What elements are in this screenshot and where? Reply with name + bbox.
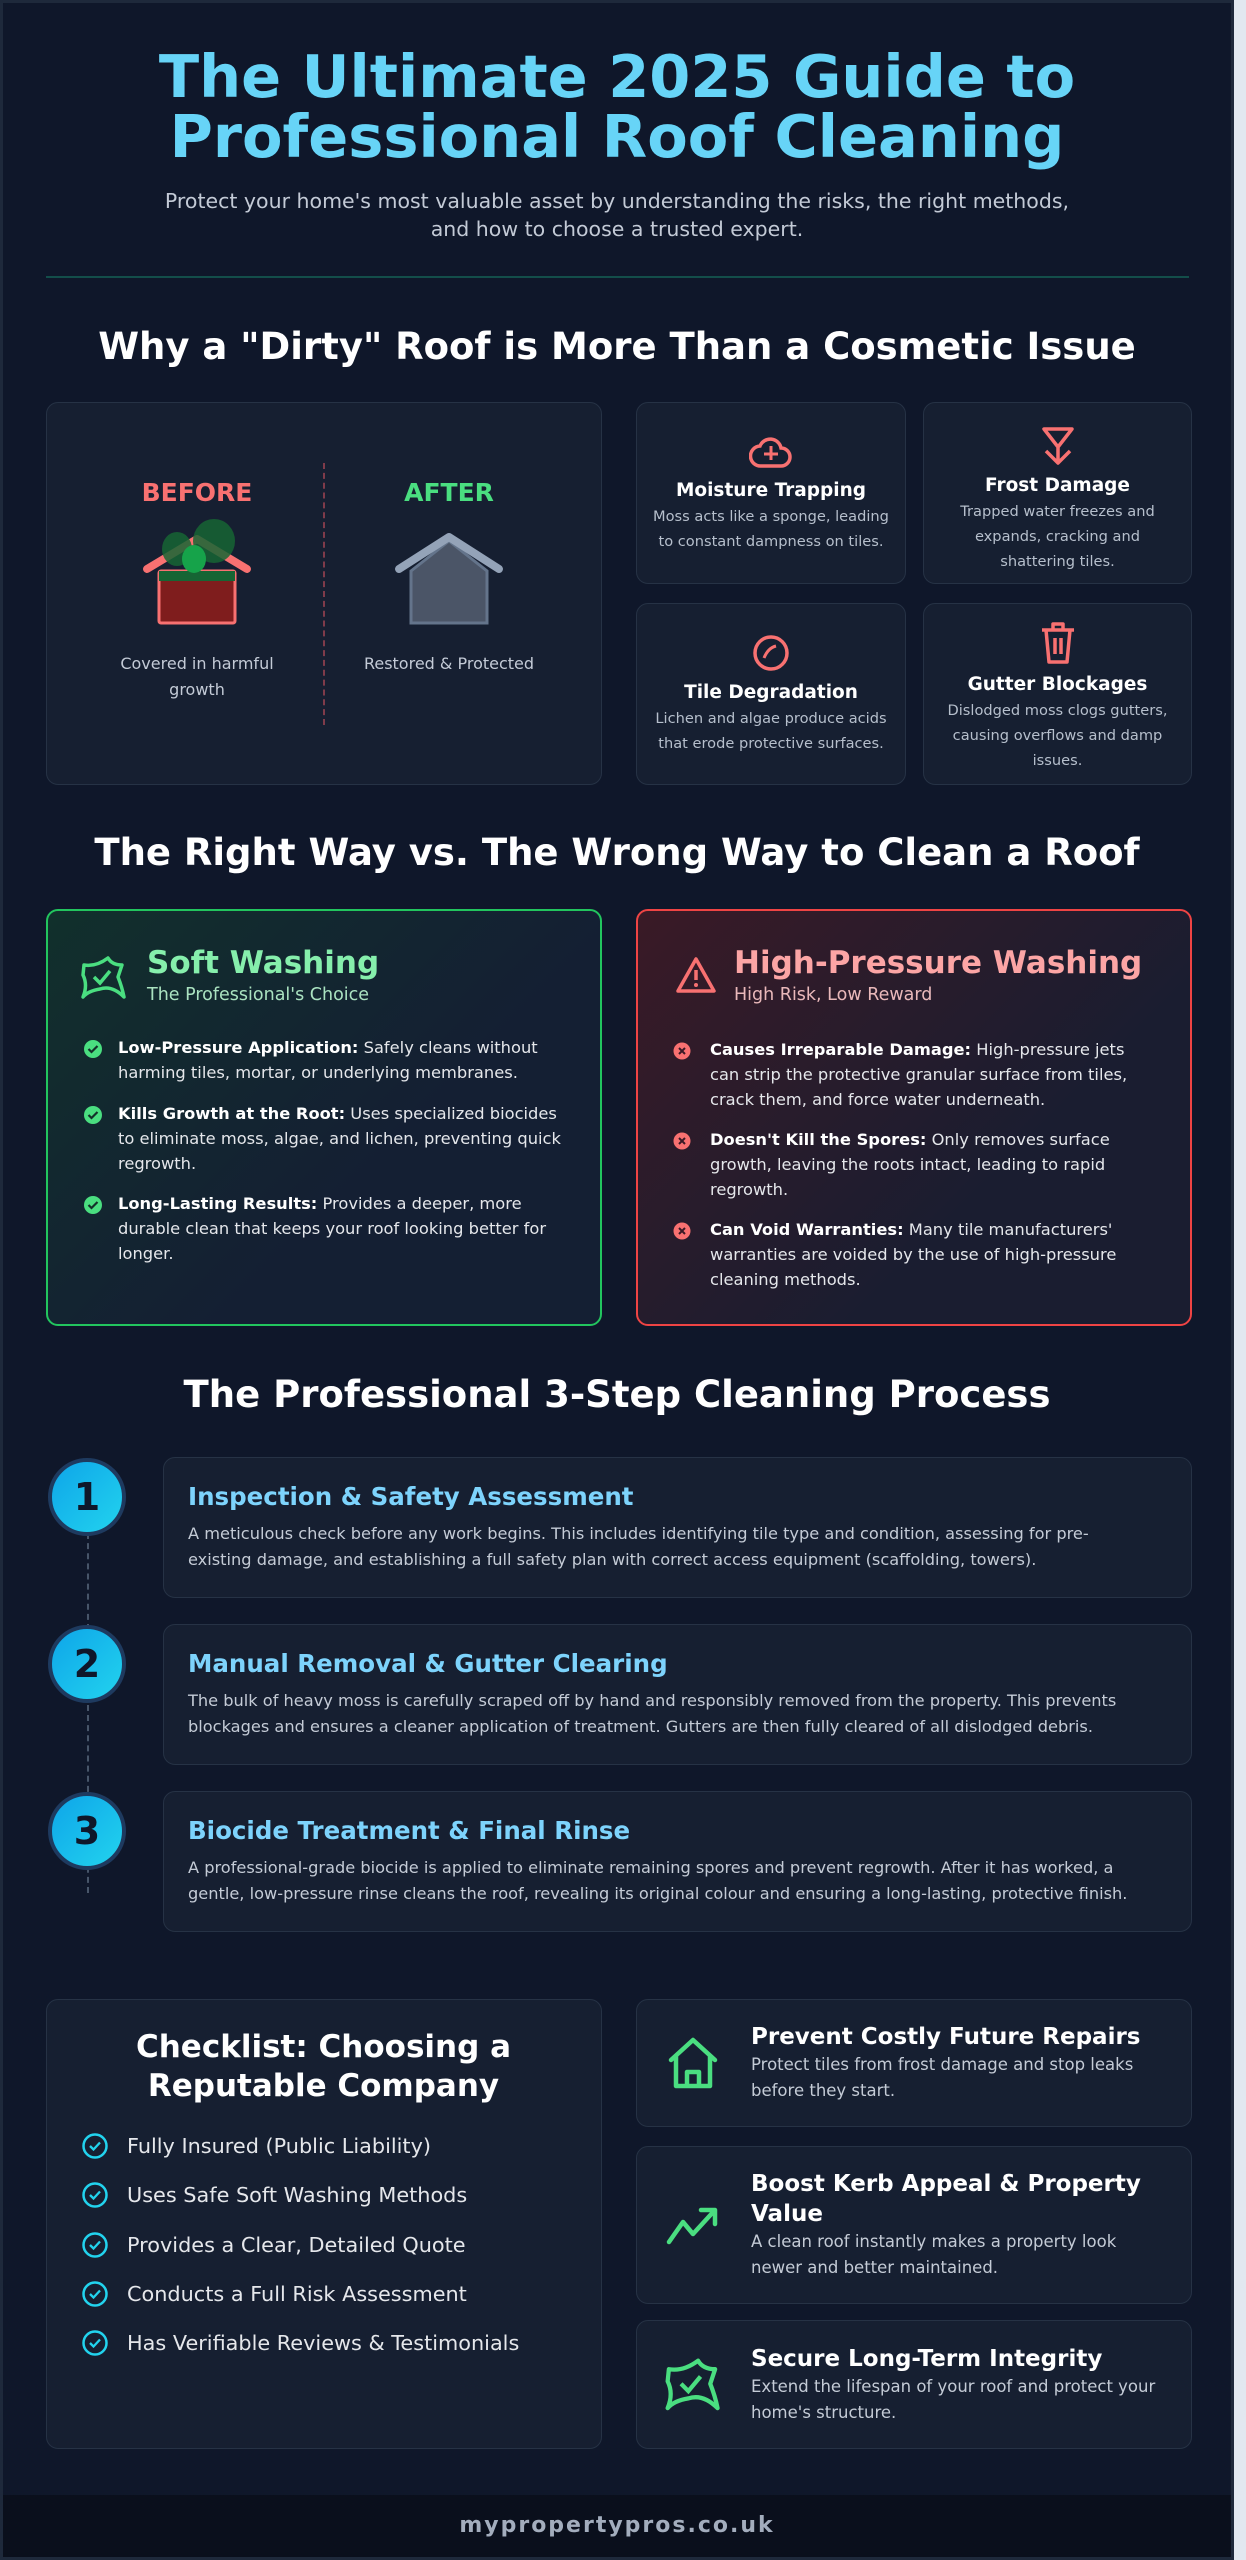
before column: Covered in harmful [120,654,274,673]
step 3 number [48,1792,126,1870]
subtitle [165,189,1069,241]
panel: checklist [46,1999,602,2449]
high pressure header: High Risk, Low Reward [734,985,932,1005]
icon: shield check [81,956,126,999]
benefit: prevent repairs [636,1999,1192,2127]
title: Professional Roof Cleaning [170,102,1064,171]
panel: soft washing: Long-Lasting Results: Provides a deeper, more durable clean that keeps your roof looking better for longer. [118,1194,546,1263]
icon: trend up [666,2208,718,2244]
card: moisture trapping: Moss acts like a sponge, leading [653,508,889,525]
benefit: kerb appeal: Value [751,2201,823,2227]
icon: clean house [395,533,503,624]
step 1 card: A meticulous check before any work begins. This includes identifying tile type and condition, assessing for pre-existing damage, and establishing a full safety plan with correct access equipment (scaffolding, towers). [188,1524,1089,1569]
checklist items: Uses Safe Soft Washing Methods [127,2183,467,2207]
benefit: kerb appeal: newer and better maintained. [751,2258,998,2277]
heading: right vs wrong: The Right Way vs. The Wrong Way to Clean a Roof [94,831,1140,874]
panel: before/after [46,402,602,785]
icon: gauge [753,635,789,671]
checklist items: Conducts a Full Risk Assessment [127,2282,467,2306]
step 3 card: A professional-grade biocide is applied to eliminate remaining spores and prevent regrowth. After it has worked, a gentle, low-pressure rinse cleans the roof, revealing its original colour and ensuring a long-lasting, protective finish. [188,1858,1127,1903]
soft washing header: The Professional's Choice [147,985,369,1005]
benefit: kerb appeal [636,2146,1192,2304]
checklist items [82,2133,519,2356]
card: gutter blockages [923,603,1192,785]
benefit: kerb appeal: A clean roof instantly makes a property look [751,2232,1116,2251]
step 3 card: Biocide Treatment & Final Rinse [188,1816,630,1845]
benefit: kerb appeal: Boost Kerb Appeal & Property [751,2171,1141,2197]
checklist title: Checklist: Choosing a [136,2029,511,2065]
icon: mossy house [143,519,251,624]
checklist items: Provides a Clear, Detailed Quote [127,2233,466,2257]
step 2 card [163,1624,1192,1765]
step 1 number: 1 [74,1475,100,1519]
high pressure header [734,945,1142,1005]
after column [364,478,534,673]
heading: 3-step process: The Professional 3-Step Cleaning Process [184,1373,1050,1416]
card: tile degradation: Tile Degradation [684,682,858,703]
step 2 card: Manual Removal & Gutter Clearing [188,1649,668,1678]
step 2 number: 2 [74,1642,100,1686]
step 2 number [48,1625,126,1703]
after column: Restored & Protected [364,654,534,673]
step 1 card: Inspection & Safety Assessment [188,1482,634,1511]
icon: shield check [666,2358,720,2410]
card: moisture trapping [636,402,906,584]
benefit: integrity: home's structure. [751,2402,896,2422]
card: frost damage: Trapped water freezes and [960,503,1155,520]
card: tile degradation: Lichen and algae produce acids [655,710,887,727]
list: soft washing benefits [84,1038,561,1263]
panel: soft washing: Low-Pressure Application: Safely cleans without harming tiles, mortar, or underlying membranes. [118,1038,538,1082]
benefit: integrity [636,2320,1192,2449]
heading: why dirty roof: Why a "Dirty" Roof is More Than a Cosmetic Issue [98,325,1136,368]
card: gutter blockages: causing overflows and damp [953,727,1162,744]
icon: warning [676,957,716,993]
before column: BEFORE [142,478,252,507]
icon: house [668,2038,718,2088]
benefit: integrity: Extend the lifespan of your roof and protect your [751,2376,1155,2396]
footer [3,2495,1231,2560]
footer: mypropertypros.co.uk [459,2513,775,2538]
subtitle: Protect your home's most valuable asset by understanding the risks, the right methods, [165,189,1069,213]
step 1 card [163,1457,1192,1598]
card: frost damage: expands, cracking and [975,528,1140,545]
card: tile degradation: that erode protective surfaces. [658,734,884,752]
icon: frost [1042,427,1074,465]
card: gutter blockages: issues. [1033,752,1082,769]
after column: AFTER [404,478,494,507]
checklist title [136,2029,511,2104]
high pressure header: High-Pressure Washing [734,945,1142,981]
card: moisture trapping: to constant dampness on tiles. [658,532,883,550]
card: gutter blockages: Dislodged moss clogs gutters, [948,702,1167,719]
card: frost damage: shattering tiles. [1000,553,1115,570]
card: frost damage: Frost Damage [985,475,1130,496]
panel: soft washing: Kills Growth at the Root: Uses specialized biocides to eliminate moss, algae, and lichen, preventing quick regrowth. [118,1104,561,1173]
card: tile degradation [636,603,906,785]
panel: high pressure: Doesn't Kill the Spores: Only removes surface growth, leaving the roots intact, leading to rapid regrowth. [710,1130,1110,1199]
icon: cloud [749,437,792,468]
icon: bin [1042,622,1074,664]
title: The Ultimate 2025 Guide to [159,42,1075,111]
card: frost damage [923,402,1192,584]
title [159,42,1075,171]
panel: high pressure: Causes Irreparable Damage: High-pressure jets can strip the protective granular surface from tiles, crack them, and force water underneath. [710,1040,1127,1109]
step 2 card: The bulk of heavy moss is carefully scraped off by hand and responsibly removed from the property. This prevents blockages and ensures a cleaner application of treatment. Gutters are then fully cleared of all dislodged debris. [188,1691,1116,1736]
before column: growth [169,680,225,699]
soft washing header: Soft Washing [147,945,379,981]
before column [120,478,274,699]
benefit: prevent repairs: Prevent Costly Future Repairs [751,2024,1140,2050]
panel: high pressure [636,909,1192,1326]
benefit: prevent repairs: before they start. [751,2081,895,2100]
soft washing header [146,945,379,1005]
benefit: integrity: Secure Long-Term Integrity [751,2346,1102,2372]
panel: soft washing [46,909,602,1326]
list: high pressure risks [674,1040,1127,1289]
step 3 card [163,1791,1192,1932]
checklist items: Has Verifiable Reviews & Testimonials [127,2331,519,2355]
step 1 number [48,1458,126,1536]
step 3 number: 3 [74,1809,100,1853]
subtitle: and how to choose a trusted expert. [431,217,803,241]
card: gutter blockages: Gutter Blockages [968,674,1147,695]
card: moisture trapping: Moisture Trapping [676,480,866,501]
checklist items: Fully Insured (Public Liability) [127,2134,431,2158]
benefit: prevent repairs: Protect tiles from frost damage and stop leaks [751,2055,1133,2074]
panel: high pressure: Can Void Warranties: Many tile manufacturers' warranties are voided by the use of high-pressure cleaning methods. [710,1220,1116,1289]
checklist title: Reputable Company [148,2068,499,2104]
